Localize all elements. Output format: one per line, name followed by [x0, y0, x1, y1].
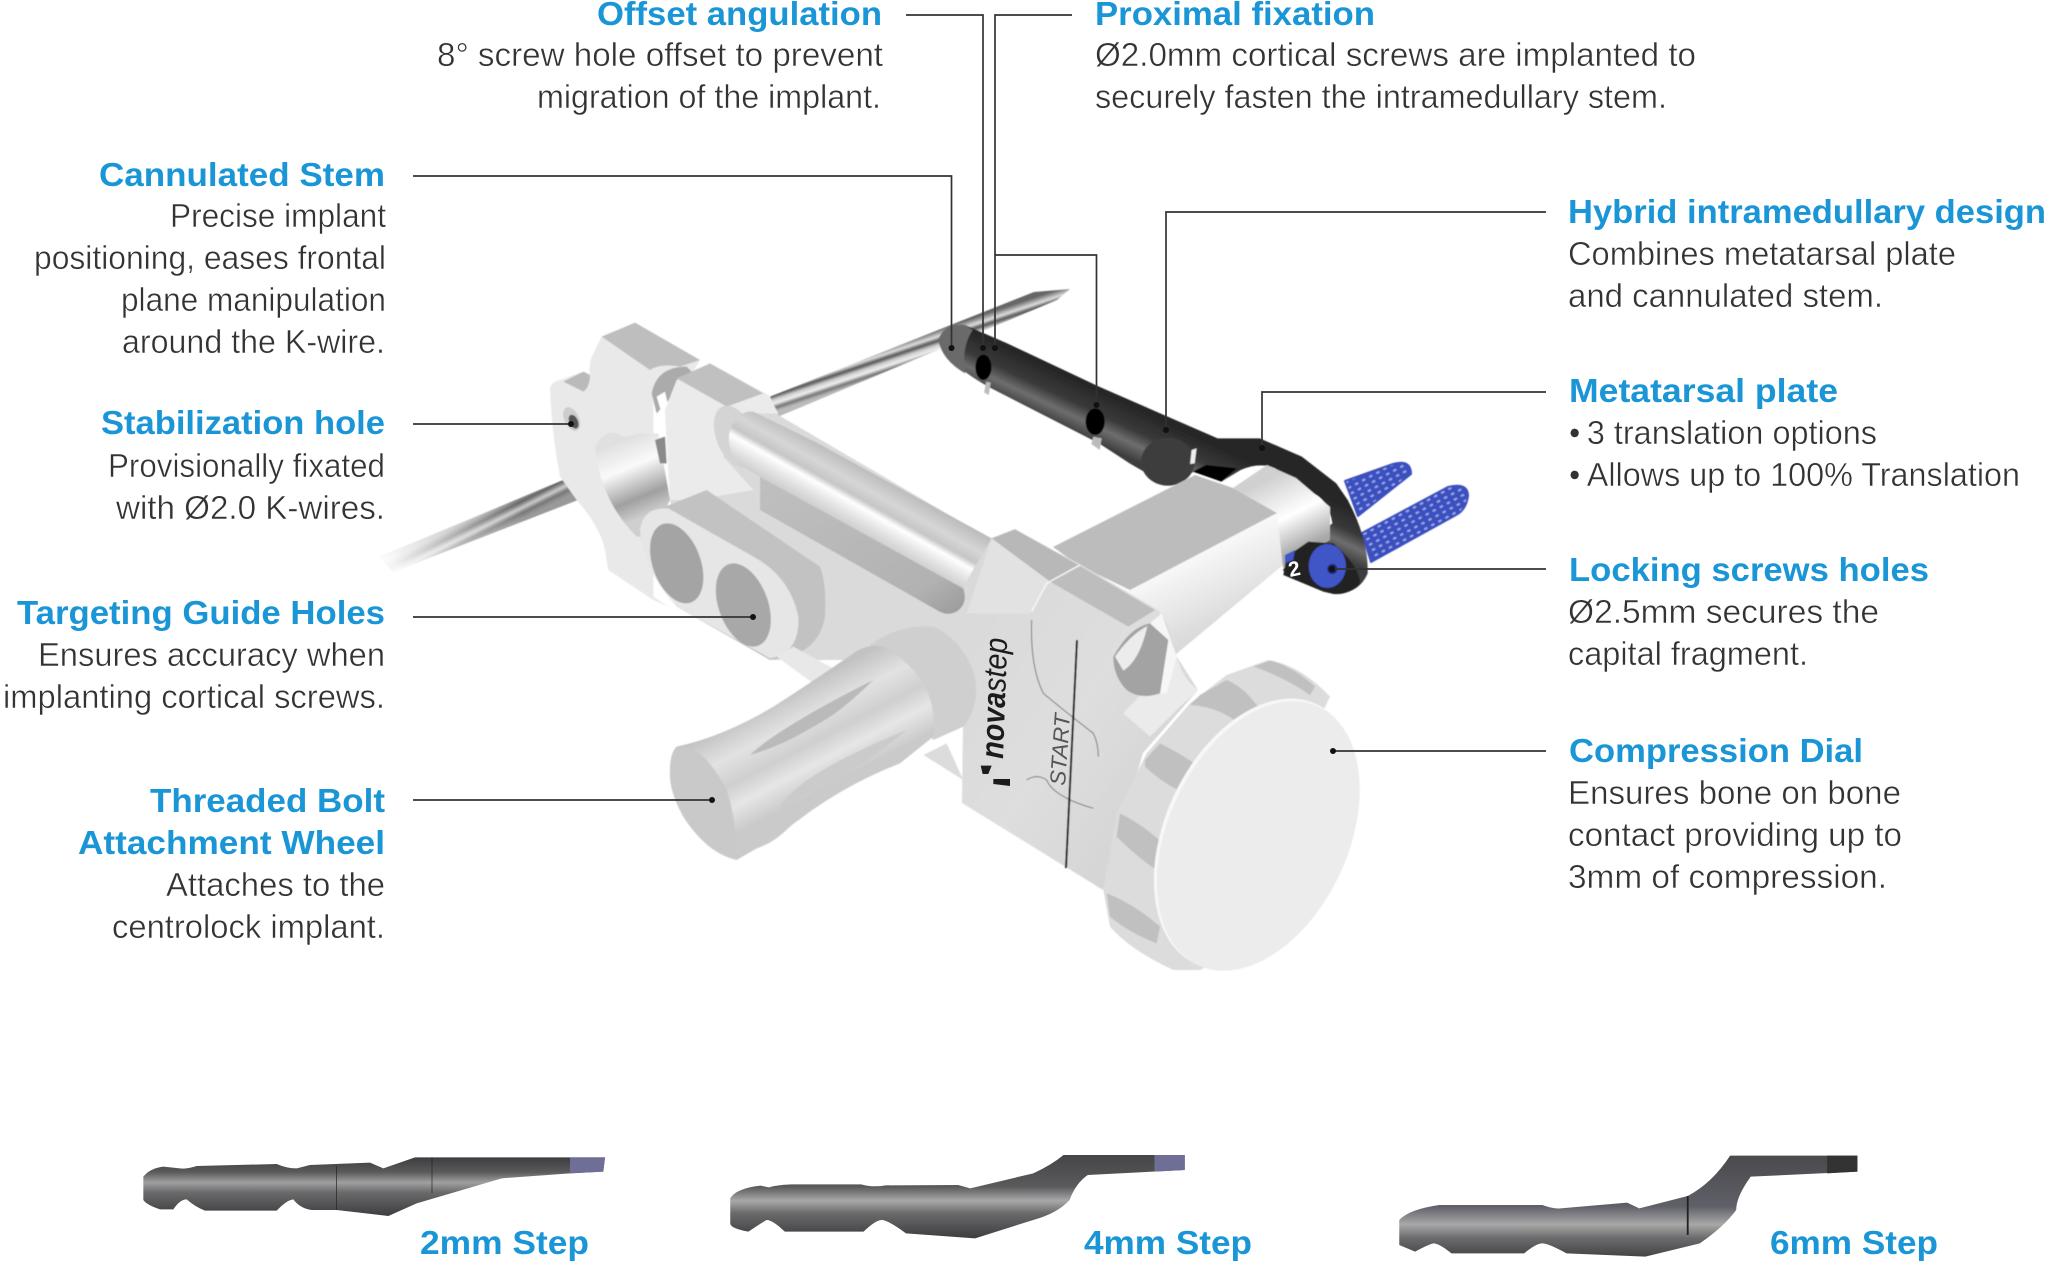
label: Stabilization hole: Stabilization hole — [101, 404, 385, 441]
label: Cannulated Stem: Precise implant — [170, 197, 386, 234]
label: Locking screws holes — [1568, 551, 1929, 672]
label: Targeting Guide Holes: Ensures accuracy when — [38, 636, 385, 673]
caption: 2mm Step: 2mm Step — [420, 1224, 589, 1261]
blue screws — [1345, 463, 1468, 562]
implants: 4mm and 6mm steps — [730, 1155, 1857, 1257]
K-wire, rear and tip segments — [380, 289, 1070, 572]
front clamp plate — [665, 363, 778, 500]
label: Metatarsal plate: • 3 translation options — [1569, 414, 1877, 451]
engraved logo: novastep: novastep — [974, 637, 1014, 759]
label: Locking screws holes: Locking screws holes — [1569, 551, 1929, 588]
guide rod — [729, 411, 992, 588]
label: Targeting Guide Holes: Targeting Guide Holes — [17, 594, 385, 631]
main rail — [640, 363, 993, 720]
threaded bolt attachment wheel — [670, 626, 976, 860]
label: Metatarsal plate — [1569, 372, 2020, 493]
rod socket — [705, 399, 765, 474]
label: Compression Dial — [1568, 732, 1902, 895]
label: Cannulated Stem: plane manipulation — [121, 281, 386, 318]
center block — [962, 529, 1198, 890]
label: Targeting Guide Holes — [3, 594, 385, 715]
label: Threaded Bolt Attachment Wheel: centrolock implant. — [112, 908, 385, 945]
implant: 2mm step — [143, 1157, 605, 1216]
leader: Stabilization hole — [413, 421, 574, 427]
label: Stabilization hole: Provisionally fixated — [108, 447, 385, 484]
rear clamp plate — [550, 323, 700, 607]
leader: Compression Dial — [1330, 748, 1546, 754]
label: Hybrid intramedullary design: and cannulated stem. — [1568, 277, 1883, 314]
device illustration: compression guide with implant — [380, 289, 1468, 1003]
label: Locking screws holes: Ø2.5mm secures the — [1568, 593, 1879, 630]
label: Threaded Bolt Attachment Wheel — [78, 782, 385, 945]
label: Stabilization hole: with Ø2.0 K-wires. — [115, 489, 385, 526]
compression dial — [1103, 660, 1400, 1003]
leader: Offset angulation — [906, 15, 986, 351]
label: Threaded Bolt Attachment Wheel: Attaches to the — [166, 866, 385, 903]
plate engraving: 2: 2 — [1286, 557, 1302, 582]
label: Hybrid intramedullary design: Hybrid intramedullary design — [1568, 193, 2046, 230]
leader: Metatarsal plate — [1259, 392, 1546, 451]
label: Hybrid intramedullary design — [1568, 193, 2046, 314]
plate tab with locking screw head — [1283, 542, 1360, 594]
label: Offset angulation: 8° screw hole offset to prevent — [437, 36, 883, 73]
label: Cannulated Stem: Cannulated Stem — [99, 156, 385, 193]
leader: Threaded Bolt — [413, 797, 715, 803]
implant: 4mm step — [730, 1155, 1185, 1238]
implant: 6mm step — [1399, 1156, 1857, 1257]
upper right block — [1053, 465, 1330, 655]
engraved text: START: START — [1045, 711, 1075, 786]
label: Threaded Bolt Attachment Wheel: Threaded Bolt — [150, 782, 385, 819]
label: Threaded Bolt Attachment Wheel: Attachment Wheel — [78, 824, 385, 861]
caption: 6mm Step: 6mm Step — [1770, 1224, 1938, 1261]
label: Offset angulation: migration of the implant. — [537, 78, 881, 115]
leader: Cannulated Stem — [413, 176, 954, 351]
leader: Proximal fixation — [992, 15, 1100, 408]
label: Compression Dial: contact providing up to — [1568, 816, 1902, 853]
label: Stabilization hole — [101, 404, 385, 526]
label: Targeting Guide Holes: implanting cortical screws. — [3, 678, 385, 715]
label: Locking screws holes: capital fragment. — [1568, 635, 1808, 672]
label: Cannulated Stem: positioning, eases frontal — [34, 239, 386, 276]
label: Metatarsal plate: • Allows up to 100% Translation — [1569, 456, 2020, 493]
label: Metatarsal plate: Metatarsal plate — [1569, 372, 1838, 409]
label: Cannulated Stem: around the K-wire. — [122, 323, 385, 360]
label: Cannulated Stem — [34, 156, 386, 360]
label: Offset angulation — [437, 0, 883, 115]
label: Proximal fixation — [1095, 0, 1696, 115]
label: Compression Dial: Ensures bone on bone — [1568, 774, 1901, 811]
logo mark — [981, 766, 1010, 786]
label: Compression Dial: 3mm of compression. — [1568, 858, 1887, 895]
label: Hybrid intramedullary design: Combines metatarsal plate — [1568, 235, 1956, 272]
caption: 4mm Step: 4mm Step — [1084, 1224, 1252, 1261]
leader: Hybrid intramedullary design — [1163, 212, 1546, 433]
slot below the rod — [760, 477, 965, 614]
targeting guide holes — [640, 490, 825, 660]
leader: Targeting Guide Holes — [413, 614, 756, 620]
leader: Locking screws holes — [1329, 566, 1546, 572]
label: Proximal fixation: Ø2.0mm cortical screws are implanted to — [1095, 36, 1696, 73]
metatarsal plate and stem — [938, 325, 1368, 593]
label: Compression Dial: Compression Dial — [1569, 732, 1863, 769]
label: Proximal fixation: securely fasten the intramedullary stem. — [1095, 78, 1667, 115]
